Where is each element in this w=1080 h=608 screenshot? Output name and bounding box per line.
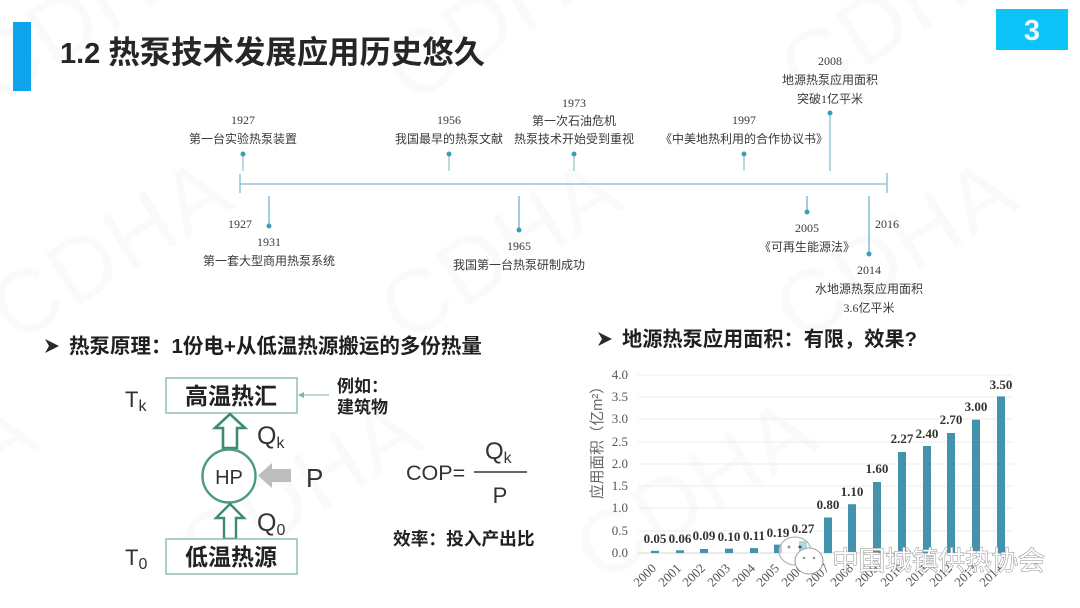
Qk label: Q	[257, 422, 276, 450]
x axis years: 2013	[951, 561, 980, 590]
heat pump diagram	[125, 377, 388, 574]
Q0 label: Q	[257, 509, 276, 537]
y axis labels: 2.0	[612, 456, 628, 471]
y axis labels: 2.5	[612, 434, 628, 449]
event 1973: 1973	[562, 96, 586, 110]
x axis years: 2010	[877, 561, 906, 590]
COP formula	[406, 438, 527, 508]
icon: WeChat bubbles	[779, 537, 823, 574]
event 1956	[395, 113, 503, 171]
example note: 例如：	[337, 377, 388, 396]
event 2014: 水地源热泵应用面积	[815, 281, 923, 296]
event 1965: 我国第一台热泵研制成功	[453, 257, 585, 272]
event 1956: 1956	[437, 113, 461, 127]
title: 1.2 热泵技术发展应用历史悠久	[60, 35, 485, 70]
event 2008: 突破1亿平米	[797, 91, 863, 106]
event 2014	[815, 196, 923, 315]
x axis years: 2007	[803, 560, 832, 590]
y axis labels: 1.0	[612, 500, 628, 515]
heading: ground source area: 地源热泵应用面积：有限，效果?	[622, 327, 917, 351]
x axis years: 2006	[778, 560, 807, 590]
event 2005: 2005	[795, 221, 819, 235]
event 1965	[453, 196, 585, 272]
event 1973	[514, 96, 634, 171]
page number badge: 3	[1024, 15, 1040, 47]
event 2005	[759, 196, 855, 254]
event 1931	[203, 196, 335, 268]
value labels: 0.27	[792, 521, 815, 536]
Tk label: k	[138, 398, 147, 415]
HP circle	[202, 450, 256, 502]
Qk label: k	[276, 435, 285, 452]
arrow Qk up	[215, 414, 245, 448]
value labels: 2.40	[916, 426, 938, 441]
timeline	[189, 54, 923, 315]
example note	[337, 377, 388, 417]
x axis years: 2005	[753, 561, 782, 590]
text: CDHA	[163, 378, 439, 602]
event 2008: 地源热泵应用面积	[782, 72, 878, 87]
Tk label: T	[125, 387, 138, 412]
low temp source box	[166, 539, 297, 574]
value labels: 1.10	[841, 484, 863, 499]
x axis years: 2004	[729, 560, 758, 590]
x axis years: 2014	[976, 560, 1005, 590]
account name: 中国城镇供热协会	[832, 546, 1045, 576]
value labels: 3.50	[990, 377, 1012, 392]
x axis years: 2001	[655, 561, 684, 590]
label 1927 start: 1927	[228, 217, 252, 231]
event 1931: 第一套大型商用热泵系统	[203, 253, 335, 268]
example note: 建筑物	[337, 397, 388, 417]
x axis years: 2002	[679, 561, 708, 590]
y axis title: 应用面积（亿m²）	[588, 379, 606, 499]
value labels: 0.06	[669, 531, 692, 546]
value labels: 0.80	[817, 497, 839, 512]
value labels: 1.60	[866, 461, 888, 476]
text: CDHA	[363, 138, 639, 362]
x axis years: 2009	[852, 561, 881, 590]
event 1927 device	[189, 113, 297, 171]
event 2014: 3.6亿平米	[843, 300, 895, 315]
y axis labels: 3.5	[612, 389, 628, 404]
source watermark: WeChat icon and name	[779, 537, 1045, 576]
value labels: 2.27	[891, 431, 914, 446]
event 1927 device: 1927	[231, 113, 255, 127]
x axis years: 2012	[926, 561, 955, 590]
value labels: 0.10	[718, 529, 740, 544]
text: CDHA	[558, 378, 834, 602]
event 1973: 第一次石油危机	[532, 114, 616, 128]
event 2008	[782, 54, 878, 171]
arrow P	[258, 463, 291, 488]
high temp sink box	[166, 378, 297, 413]
event 1965: 1965	[507, 239, 531, 253]
event 2008: 2008	[818, 54, 842, 68]
x axis years	[630, 560, 1005, 590]
value labels: 0.09	[693, 528, 716, 543]
heading: heat pump principle: 热泵原理：1份电+从低温热源搬运的多份热量	[69, 335, 482, 358]
event 2014: 2014	[857, 263, 881, 277]
P label: P	[306, 463, 323, 493]
x axis years: 2011	[902, 561, 931, 589]
COP formula: k	[504, 450, 513, 467]
x axis years: 2000	[630, 561, 659, 590]
event 1931: 1931	[257, 235, 281, 249]
value labels: 0.05	[644, 531, 667, 546]
x axis years: 2008	[827, 561, 856, 590]
COP formula: COP=	[406, 461, 465, 485]
text: CDHA	[758, 138, 1034, 362]
arrow Q0 up	[216, 504, 244, 539]
T0 label: 0	[138, 556, 147, 573]
event 1973: 热泵技术开始受到重视	[514, 131, 634, 146]
y axis labels: 0.0	[612, 545, 628, 560]
example arrow	[298, 392, 329, 398]
bars	[651, 396, 1005, 553]
event 1956: 我国最早的热泵文献	[395, 131, 503, 146]
y axis labels	[612, 367, 628, 560]
label 2016 end: 2016	[875, 217, 899, 231]
y axis labels: 3.0	[612, 411, 628, 426]
event 1997: 《中美地热利用的合作协议书》	[660, 131, 828, 146]
COP formula: Q	[485, 438, 504, 465]
value labels	[644, 377, 1012, 546]
efficiency note: 效率：投入产出比	[393, 529, 535, 549]
HP circle: HP	[215, 467, 243, 489]
event 1927 device: 第一台实验热泵装置	[189, 131, 297, 146]
COP formula: P	[493, 483, 507, 508]
x axis years: 2003	[704, 561, 733, 590]
value labels: 0.11	[743, 528, 765, 543]
event 2005: 《可再生能源法》	[759, 240, 855, 254]
value labels: 0.19	[767, 525, 790, 540]
bar chart	[588, 367, 1013, 590]
timeline axis	[240, 173, 887, 193]
event 1997	[660, 113, 828, 171]
T0 label: T	[125, 545, 138, 570]
low temp source box: 低温热源	[185, 544, 277, 570]
y axis labels: 4.0	[612, 367, 628, 382]
event 1997: 1997	[732, 113, 756, 127]
value labels: 3.00	[965, 399, 987, 414]
title accent bar	[13, 22, 31, 91]
y axis labels: 1.5	[612, 478, 628, 493]
y axis labels: 0.5	[612, 523, 628, 538]
page number badge	[996, 9, 1068, 50]
gridlines	[638, 375, 1013, 553]
value labels: 2.70	[940, 412, 962, 427]
Q0 label: 0	[276, 522, 285, 539]
high temp sink box: 高温热汇	[185, 383, 277, 409]
